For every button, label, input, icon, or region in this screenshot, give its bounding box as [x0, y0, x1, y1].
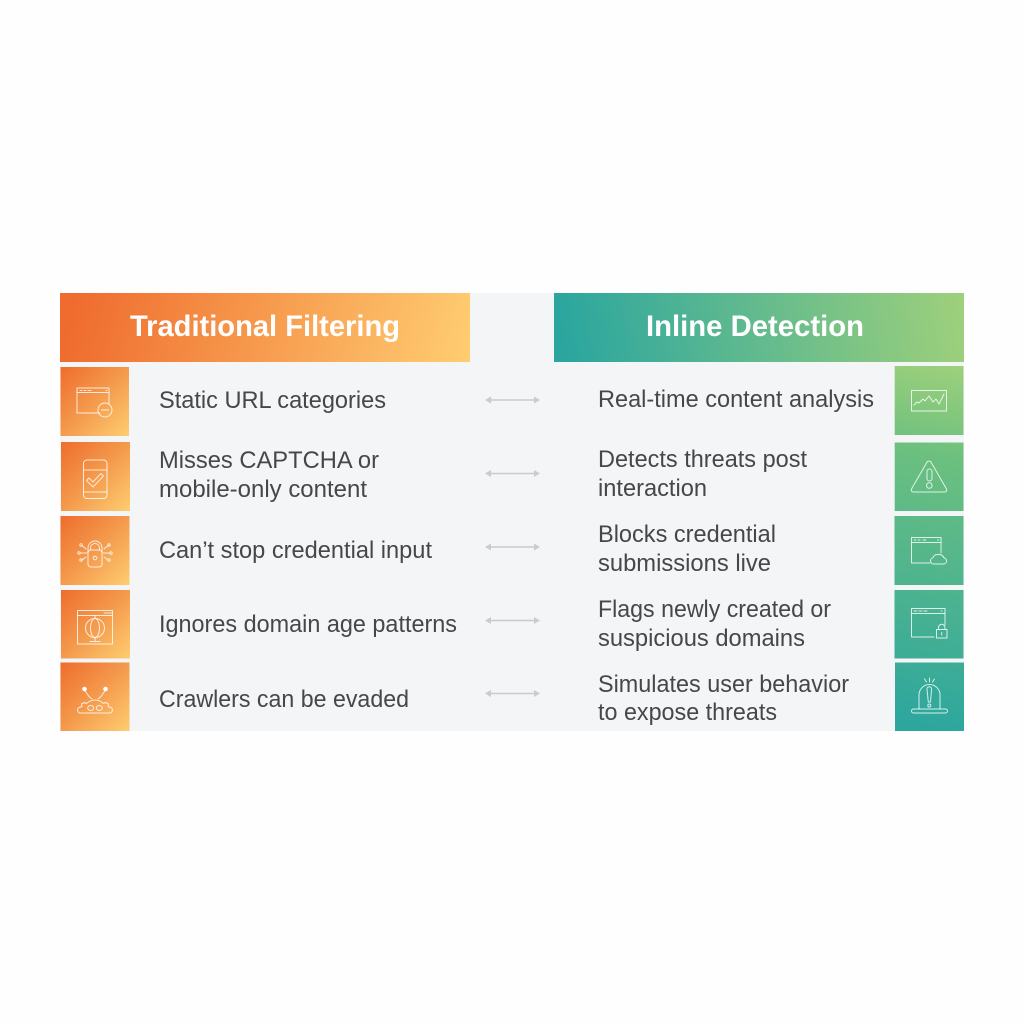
comparison panel background	[60, 293, 964, 731]
left icon: browser window blocked	[60, 367, 129, 436]
row 5 right text: Simulates user behavior	[598, 671, 849, 698]
header: Inline Detection	[554, 293, 964, 362]
row 5 right text	[598, 671, 849, 726]
row 3 right text: Blocks credential	[598, 521, 776, 548]
row 5 right text: to expose threats	[598, 699, 777, 726]
header: Traditional Filtering: Traditional Filtering	[130, 310, 400, 343]
right icon: chart monitor	[895, 366, 964, 435]
row 1 left text: Static URL categories	[159, 387, 386, 414]
row 3 right text	[598, 521, 776, 577]
row 2 right text: interaction	[598, 475, 707, 502]
left icon: browser window with globe	[61, 590, 130, 658]
row 2 left text: Misses CAPTCHA or	[159, 447, 379, 474]
row 3 arrow	[485, 544, 540, 550]
row 2 right text: Detects threats post	[598, 446, 807, 473]
right icon: browser window with lock	[894, 590, 964, 658]
right icon: alarm siren	[895, 662, 964, 731]
header: Inline Detection: Inline Detection	[646, 310, 864, 343]
row 2 left text: mobile-only content	[159, 476, 367, 503]
left icon: crawler robot	[60, 662, 130, 731]
right icon: warning triangle	[895, 442, 964, 511]
row 4 right text: suspicious domains	[598, 625, 805, 652]
row 5 left text: Crawlers can be evaded	[159, 686, 409, 713]
row 4 left text: Ignores domain age patterns	[159, 611, 457, 638]
row 3 left text: Can’t stop credential input	[159, 537, 432, 564]
left icon: padlock with circuit lines	[60, 516, 130, 585]
row 2 right text	[598, 446, 807, 502]
row 1 arrow	[485, 396, 540, 404]
row 4 right text: Flags newly created or	[598, 596, 831, 623]
header: Traditional Filtering	[60, 293, 470, 362]
row 1 right text: Real-time content analysis	[598, 386, 874, 413]
right icon: browser window with cloud	[894, 516, 964, 585]
row 2 arrow	[485, 470, 540, 477]
row 3 right text: submissions live	[598, 550, 771, 577]
row 4 right text	[598, 596, 831, 652]
left icon: phone with check mark	[61, 442, 130, 511]
row 4 arrow	[485, 617, 540, 624]
row 2 left text	[159, 447, 379, 503]
row 5 arrow	[485, 690, 540, 697]
